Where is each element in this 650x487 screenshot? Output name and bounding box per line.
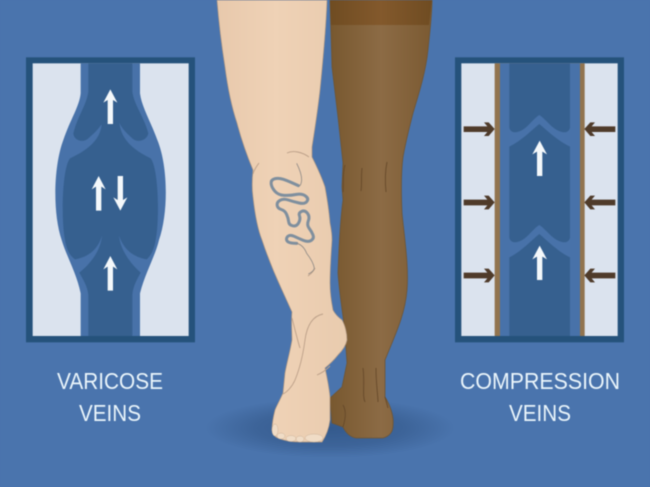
vein blood with valves [63,63,158,336]
arrow: up top [103,89,117,124]
stocking wall strips [495,63,585,336]
arrow: up bottom [103,256,117,291]
panel: compression veins [455,57,624,342]
arrow: up upper [532,141,547,176]
toes [272,424,323,442]
label: compression veins: COMPRESSION [460,368,620,394]
arrow: down middle [113,176,127,211]
vein wall [55,63,166,336]
label: compression veins [460,368,620,426]
pressure arrows [464,122,615,282]
vein blood upper [509,63,570,132]
vein blood lower [509,234,570,336]
vein blood middle [509,124,570,242]
skin creases [253,152,330,394]
arrow: up middle [92,176,106,211]
label: varicose veins: VEINS [79,400,141,426]
panel: varicose veins [26,57,195,342]
varicose vein [271,163,314,274]
right leg in compression stocking [330,0,432,438]
vein wall [500,63,580,336]
stocking top band [330,0,432,25]
label: varicose veins: VARICOSE [57,368,163,394]
stocking folds [343,162,388,427]
floor shadow [205,398,455,458]
left leg with varicose veins [217,0,347,442]
arrow: up lower [532,246,547,280]
label: varicose veins [57,368,163,426]
label: compression veins: VEINS [509,400,571,426]
